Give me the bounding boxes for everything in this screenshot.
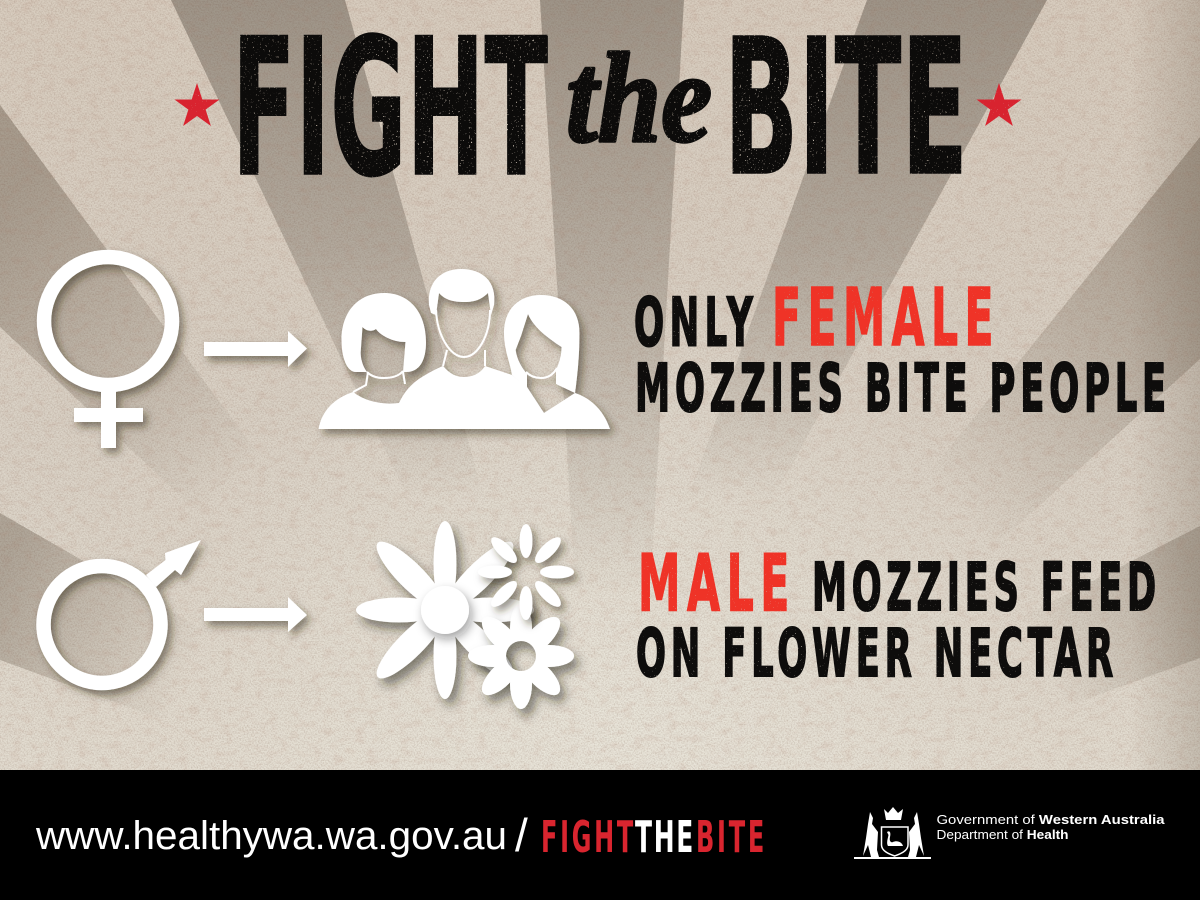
crest swan bbox=[887, 831, 903, 846]
icon: female symbol bbox=[44, 257, 172, 448]
small flower bbox=[478, 524, 574, 620]
footer bar bbox=[0, 770, 1200, 900]
footer website url: www.healthywa.wa.gov.au bbox=[35, 814, 507, 858]
bodies bbox=[318, 366, 610, 429]
text: FEMALE: FEMALE bbox=[772, 272, 1000, 364]
arrow: female to people bbox=[204, 331, 307, 367]
footer slash: / bbox=[515, 809, 528, 861]
icon: group of people bbox=[318, 269, 610, 429]
lower flower bbox=[468, 603, 574, 709]
right woman's hair bbox=[504, 295, 580, 393]
crest right kangaroo bbox=[908, 812, 924, 857]
footer government text: Government of Western Australia bbox=[936, 812, 1165, 827]
title word: the: the bbox=[566, 27, 712, 169]
title word: BITE: BITE bbox=[724, 0, 968, 218]
text block: only female mozzies bite people bbox=[634, 272, 1171, 427]
icon: left red star bbox=[174, 83, 220, 126]
text: MALE: MALE bbox=[638, 540, 796, 630]
large flower bbox=[356, 521, 534, 699]
man's hair bbox=[429, 269, 494, 315]
footer campaign name: THE bbox=[635, 812, 695, 863]
crest base line bbox=[854, 857, 931, 859]
icon: Western Australia coat of arms bbox=[854, 807, 931, 859]
arrow: male to flowers bbox=[204, 597, 307, 632]
crest shield bbox=[882, 827, 908, 856]
footer government text bbox=[936, 812, 1165, 842]
crest left kangaroo bbox=[863, 812, 879, 857]
crest crown bbox=[884, 807, 903, 820]
large flower centre bbox=[421, 586, 469, 634]
icon: flowers bbox=[356, 521, 574, 709]
icon: male symbol bbox=[44, 540, 201, 683]
face and neck outlines bbox=[353, 310, 557, 392]
footer government text: Department of Health bbox=[936, 827, 1069, 842]
footer campaign name: FIGHT bbox=[541, 812, 636, 863]
left woman's hair bbox=[342, 293, 426, 372]
icon: right red star bbox=[976, 83, 1022, 126]
text block: male mozzies feed on flower nectar bbox=[636, 540, 1161, 692]
footer campaign name: BITE bbox=[696, 812, 767, 863]
title: Fight the Bite: FIGHT bbox=[232, 0, 548, 219]
text: ONLY: ONLY bbox=[634, 284, 758, 362]
